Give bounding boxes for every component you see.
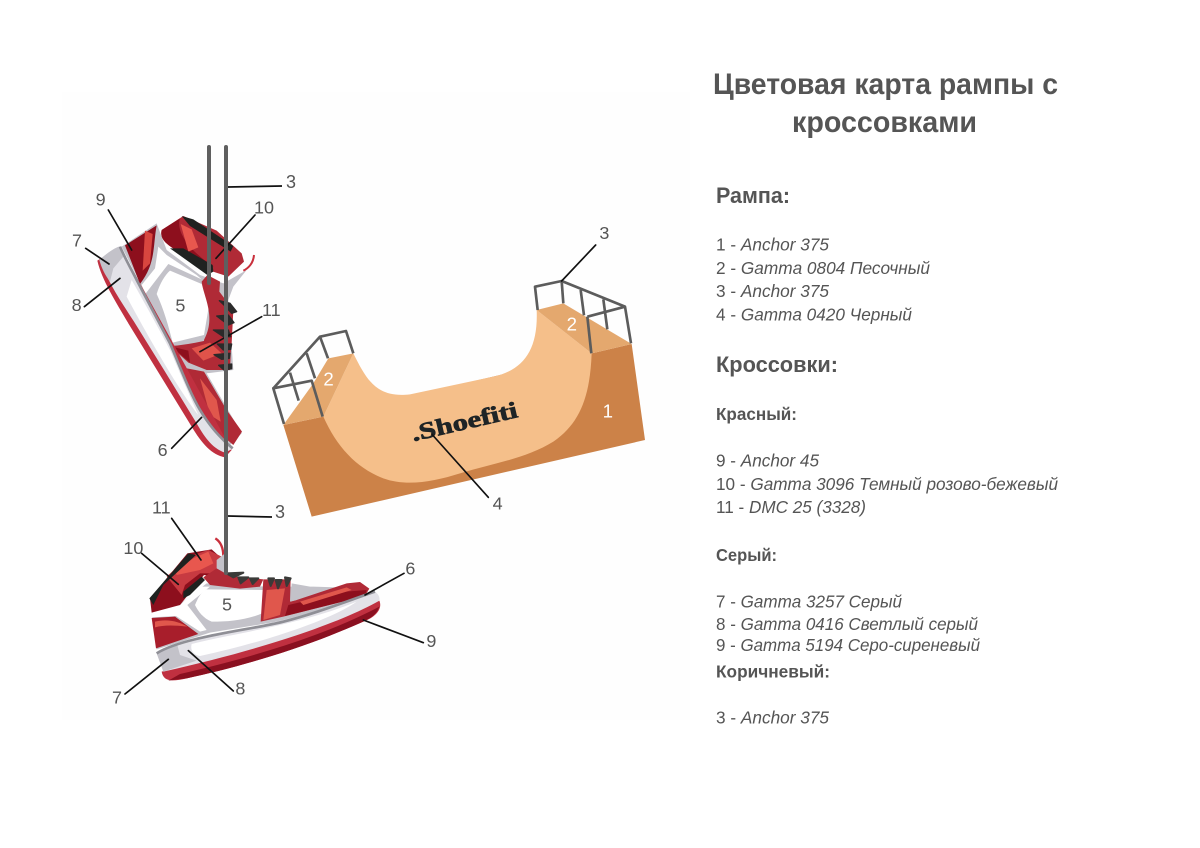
leader 7 [125,659,168,694]
heading: ramp: Рампа: [716,183,790,208]
title [713,68,1058,139]
title: кроссовками [792,106,977,139]
white strip between panels [142,247,202,294]
grey colour list: 8 - Gamma 0416 Светлый серый [716,614,978,634]
lace strip [203,568,263,589]
grey upper base [152,583,368,649]
label 6: 6 [405,558,415,578]
leader 10 [142,553,178,584]
leader 8 [188,651,233,691]
label 8: 8 [72,295,82,315]
ramp body [283,344,645,517]
label 5: 5 [222,595,232,615]
lower heel panel [152,617,198,648]
collar black stripes [149,553,196,605]
label 5: 5 [175,296,185,316]
short string [207,147,211,283]
leader 10 [216,215,255,258]
label 8: 8 [235,678,245,698]
collar mid red [167,550,222,595]
laces [213,301,237,370]
outsole [162,601,380,680]
label 2 right: 2 [567,313,577,334]
collar black stripes [182,216,233,252]
grey colour list: 7 - Gamma 3257 Серый [716,592,902,612]
label 1: 1 [603,400,613,421]
title: Цветовая карта рампы с [713,68,1058,101]
heel grey [99,247,123,282]
colour legend panel [713,68,1058,728]
red colour list [716,450,1058,517]
long string [224,147,228,573]
tongue curl [243,255,254,271]
collar highlight [181,224,198,252]
logo: .Shoefiti [409,397,521,447]
label 9: 9 [96,189,106,209]
lace strip [202,275,233,370]
heading: sneakers: Кроссовки: [716,352,838,377]
midsole [157,592,380,672]
leader 11 [200,317,262,352]
label 10: 10 [254,197,274,217]
toe [261,579,369,622]
ramp illustration [273,223,645,517]
ramp riding surface [323,310,592,483]
leader 3 upper [228,186,282,187]
shoelace strings [209,147,296,573]
ramp colour list: 1 - Anchor 375 [716,234,829,254]
collar highlight [175,552,213,575]
collar [150,549,222,613]
red colour list: 11 - DMC 25 (3328) [716,497,866,517]
outsole shade [168,607,379,681]
leader 11 [172,518,201,560]
side swoosh [170,335,232,370]
leader 6 [365,573,404,595]
tongue [215,538,223,557]
ankle collar [161,216,244,277]
subheading: grey: Серый: [716,545,777,565]
heel grey [157,645,197,672]
right platform [537,303,632,353]
grey colour list [716,592,980,655]
brown colour list: 3 - Anchor 375 [716,708,829,728]
leader 3 lower [228,516,272,517]
label 6: 6 [158,440,168,460]
laces [227,573,291,588]
red colour list: 9 - Anchor 45 [716,450,819,470]
label 2 left: 2 [323,368,334,389]
subheading: brown: Коричневый: [716,662,830,682]
leader 6 [172,417,202,448]
left platform [283,353,353,425]
midsole [100,246,233,453]
leader 3 [562,245,596,281]
ramp colour list: 4 - Gamma 0420 Черный [716,304,912,324]
label 3 lower: 3 [275,502,285,522]
label 11: 11 [262,300,281,320]
subheading: red: Красный: [716,404,797,424]
grey colour list: 9 - Gamma 5194 Серо-сиреневый [716,635,980,655]
foxing stripe [120,247,233,448]
white strip [152,587,210,632]
label 7: 7 [72,231,82,251]
label 11: 11 [152,498,171,518]
outsole [97,247,232,457]
red colour list: 10 - Gamma 3096 Темный розово-бежевый [716,474,1058,494]
white gap above toe [207,373,225,388]
leader 4 [432,434,488,497]
midsole white highlight [127,280,198,415]
leader 7 [86,248,109,264]
leader 9 [363,620,423,643]
toe cap [182,367,242,445]
midsole white highlight [191,602,357,656]
red heel panel [125,225,157,284]
label 9: 9 [426,631,436,651]
right railing [535,281,631,353]
leader 9 [108,210,132,250]
ramp colour list: 3 - Anchor 375 [716,281,829,301]
foxing stripe [157,592,375,653]
ramp colour list [716,234,930,324]
white side panel [157,271,209,343]
label 10: 10 [123,538,143,558]
upper sneaker [72,189,281,460]
left railing [273,331,353,424]
label 7: 7 [112,687,122,707]
white side panel [195,589,264,622]
leader 8 [84,278,120,307]
label 3 upper: 3 [286,172,296,192]
lower sneaker [112,498,436,707]
grey upper base [122,223,247,450]
label 3: 3 [599,223,609,243]
ramp colour list: 2 - Gamma 0804 Песочный [716,258,930,278]
label 4: 4 [493,493,503,513]
